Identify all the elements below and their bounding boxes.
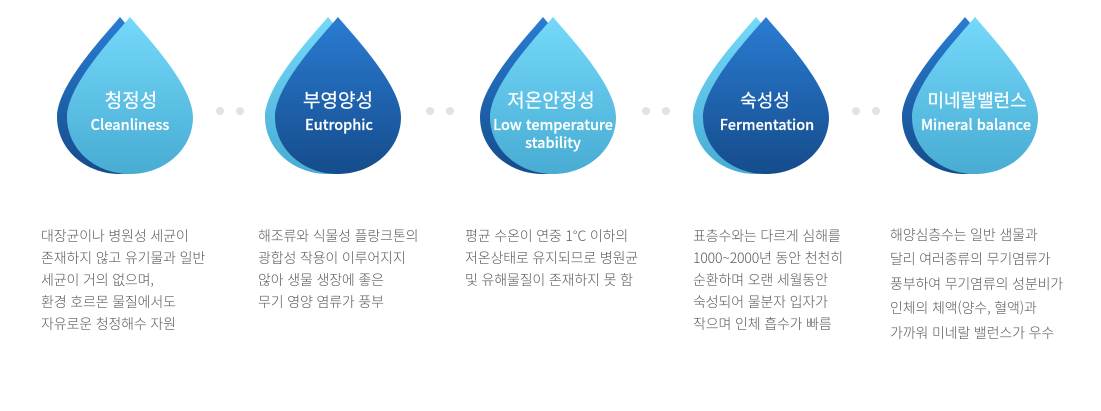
drop: Cleanliness xyxy=(57,17,193,174)
text block: Fermentation description: 작으며 인체 흡수가 빠름 xyxy=(693,314,832,334)
text block: Cleanliness description: 세균이 거의 없으며, xyxy=(41,270,154,290)
text block: Cleanliness description: 환경 호르몬 물질에서도 xyxy=(41,292,176,312)
text block: Cleanliness description: 대장균이나 병원성 세균이 xyxy=(41,226,189,246)
drop: Fermentation xyxy=(693,17,829,174)
text block: Eutrophic description xyxy=(258,226,418,312)
connector dots 4 xyxy=(852,107,880,115)
text block: Mineral balance description: 해양심층수는 일반 샘물과 xyxy=(890,224,1038,244)
text block: Mineral balance description: 가까워 미네랄 밸런스가 우수 xyxy=(890,322,1054,342)
drop: Eutrophic: 부영양성 xyxy=(303,86,373,113)
connector dots 3 xyxy=(642,107,670,115)
text block: Low temperature description: 저온상태로 유지되므로 병원균 xyxy=(465,248,638,268)
text block: Low temperature description: 평균 수온이 연중 1°C 이하의 xyxy=(465,226,628,246)
drop: Mineral balance: 미네랄밸런스 xyxy=(927,87,1027,113)
drop: Eutrophic: Eutrophic xyxy=(305,114,373,135)
drop: Low temperature stability: stability xyxy=(525,132,581,153)
text block: Cleanliness description: 존재하지 않고 유기물과 일반 xyxy=(41,248,205,268)
text block: Low temperature description: 및 유해물질이 존재하지 못 함 xyxy=(465,270,633,290)
text block: Fermentation description: 1000~2000년 동안 천천히 xyxy=(693,248,843,268)
connector dots 2 xyxy=(426,107,454,115)
text block: Eutrophic description: 광합성 작용이 이루어지지 xyxy=(258,248,406,268)
connector dots 1 xyxy=(216,107,244,115)
drop: Cleanliness: Cleanliness xyxy=(91,114,169,135)
text block: Fermentation description: 표층수와는 다르게 심해를 xyxy=(693,226,841,246)
text block: Eutrophic description: 해조류와 식물성 플랑크톤의 xyxy=(258,226,418,246)
drop: Mineral balance: Mineral balance xyxy=(921,114,1031,135)
drop: Low temperature stability: Low temperature xyxy=(493,114,613,135)
text block: Mineral balance description: 인체의 체액(양수, 혈액)과 xyxy=(890,298,1037,318)
text block: Mineral balance description xyxy=(890,224,1063,342)
drop: Eutrophic xyxy=(265,17,401,174)
text block: Cleanliness description: 자유로운 청정해수 자원 xyxy=(41,314,176,334)
drop: Cleanliness: 청정성 xyxy=(105,86,157,113)
text block: Cleanliness description xyxy=(41,226,205,334)
text block: Mineral balance description: 달리 여러종류의 무기염류가 xyxy=(890,249,1050,269)
text block: Fermentation description xyxy=(693,226,843,334)
text block: Eutrophic description: 무기 영양 염류가 풍부 xyxy=(258,292,384,312)
text block: Mineral balance description: 풍부하여 무기염류의 성분비가 xyxy=(890,274,1063,294)
text block: Low temperature description xyxy=(465,226,638,290)
drop: Mineral balance xyxy=(902,17,1038,174)
drop: Low temperature stability xyxy=(480,17,616,174)
drop: Fermentation: Fermentation xyxy=(720,114,814,135)
text block: Eutrophic description: 않아 생물 생장에 좋은 xyxy=(258,270,384,290)
text block: Fermentation description: 순환하며 오랜 세월동안 xyxy=(693,270,828,290)
drop: Fermentation: 숙성성 xyxy=(740,87,790,113)
text block: Fermentation description: 숙성되어 물분자 입자가 xyxy=(693,292,828,312)
drop: Low temperature stability: 저온안정성 xyxy=(507,86,595,113)
